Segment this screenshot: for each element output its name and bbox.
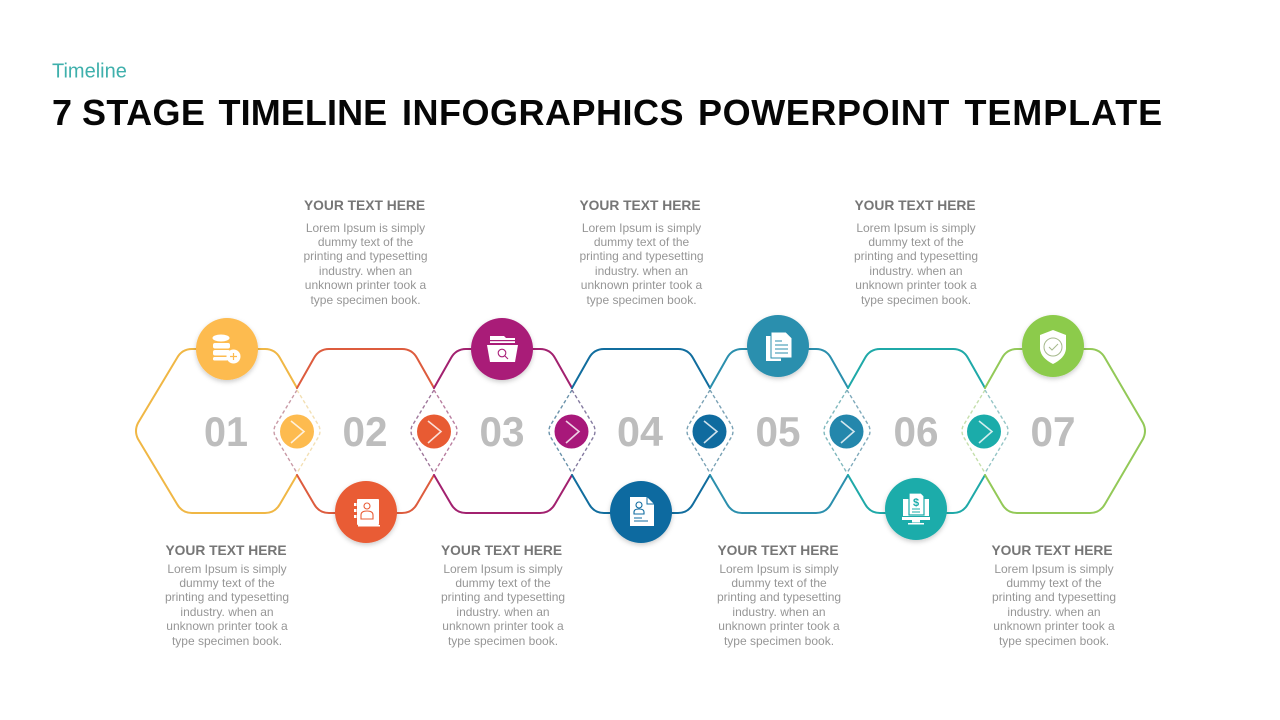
text block: stage 4: type specimen book.	[586, 293, 697, 307]
text block: stage 3: type specimen book.	[448, 634, 558, 648]
text block: stage 4: printing and typesetting	[579, 249, 704, 263]
text block: stage 1: Lorem Ipsum is simply	[167, 562, 287, 576]
text block: stage 2: dummy text of the	[318, 235, 414, 249]
text block: stage 6: printing and typesetting	[854, 249, 978, 263]
text block: stage 6: unknown printer took a	[855, 278, 977, 292]
text block: stage 7: printing and typesetting	[992, 590, 1116, 604]
text block: stage 2: YOUR TEXT HERE	[304, 198, 425, 213]
text block: stage 1: type specimen book.	[172, 634, 282, 648]
number 05: 05	[756, 408, 800, 455]
text block: stage 7	[991, 543, 1116, 648]
text block: stage 7: Lorem Ipsum is simply	[994, 562, 1114, 576]
text block: stage 4: industry. when an	[595, 264, 688, 278]
text block: stage 1: printing and typesetting	[165, 590, 289, 604]
text block: stage 2: industry. when an	[319, 264, 412, 278]
number 04: 04	[617, 408, 664, 455]
text block: stage 6	[854, 198, 978, 307]
title: POWERPOINT	[698, 92, 961, 133]
text block: stage 3	[441, 543, 565, 648]
text block: stage 4: dummy text of the	[594, 235, 690, 249]
connector 6: dashed diamond and arrow	[962, 390, 1008, 473]
text block: stage 2: printing and typesetting	[303, 249, 428, 263]
text block: stage 5	[717, 543, 841, 648]
hexagon 2 outline	[297, 349, 434, 513]
text block: stage 7: industry. when an	[1007, 605, 1101, 619]
text block: stage 7: unknown printer took a	[993, 619, 1115, 633]
connector 5: dashed diamond and arrow	[824, 390, 870, 473]
number 06: 06	[894, 408, 938, 455]
hexagon chain	[136, 349, 1145, 513]
hexagon 1 outline	[136, 349, 297, 513]
number 02: 02	[342, 408, 388, 455]
text block: stage 6: dummy text of the	[868, 235, 964, 249]
text block: stage 7: type specimen book.	[999, 634, 1109, 648]
connector 1: dashed diamond and arrow	[274, 390, 320, 473]
text block: stage 3: unknown printer took a	[442, 619, 564, 633]
text block: stage 5: dummy text of the	[731, 576, 827, 590]
stage numbers	[204, 408, 1076, 455]
text block: stage 4: unknown printer took a	[581, 278, 703, 292]
connector 4: dashed diamond and arrow	[687, 390, 733, 473]
hexagon 7 outline	[985, 349, 1145, 513]
text block: stage 7: dummy text of the	[1006, 576, 1102, 590]
title: INFOGRAPHICS	[402, 92, 695, 133]
icon: address book	[335, 481, 397, 543]
text block: stage 6: industry. when an	[869, 264, 963, 278]
title: 7	[52, 92, 82, 133]
hexagon 4 outline	[572, 349, 710, 513]
icon: monitor with invoice: $	[913, 497, 919, 509]
text block: stage 3: Lorem Ipsum is simply	[443, 562, 563, 576]
text block: stage 2	[303, 198, 428, 307]
text block: stage 3: dummy text of the	[455, 576, 551, 590]
text block: stage 4: Lorem Ipsum is simply	[582, 221, 701, 235]
text block: stage 5: unknown printer took a	[718, 619, 840, 633]
text block: stage 1: unknown printer took a	[166, 619, 288, 633]
hexagon 6 outline	[848, 349, 985, 513]
text block: stage 3: industry. when an	[456, 605, 550, 619]
icon: user document	[610, 481, 672, 543]
text block: stage 6: Lorem Ipsum is simply	[856, 221, 976, 235]
hexagon 3 outline	[434, 349, 572, 513]
number 03: 03	[480, 408, 524, 455]
hexagon 5 outline	[710, 349, 848, 513]
text block: stage 4	[579, 198, 704, 307]
text block: stage 2: type specimen book.	[310, 293, 421, 307]
text block: stage 3: YOUR TEXT HERE	[441, 543, 562, 558]
connector 2: dashed diamond and arrow	[411, 390, 457, 473]
connector 3: dashed diamond and arrow	[549, 390, 595, 473]
text block: stage 1	[165, 543, 289, 648]
text block: stage 5: YOUR TEXT HERE	[717, 543, 839, 558]
icon: shield check	[1022, 315, 1084, 377]
text block: stage 1: dummy text of the	[179, 576, 275, 590]
text block: stage 6: type specimen book.	[861, 293, 971, 307]
text block: stage 2: Lorem Ipsum is simply	[306, 221, 425, 235]
text block: stage 5: Lorem Ipsum is simply	[719, 562, 839, 576]
icon: database upload	[196, 318, 258, 380]
text block: stage 5: industry. when an	[732, 605, 826, 619]
text block: stage 4: YOUR TEXT HERE	[579, 198, 701, 213]
number 01: 01	[204, 408, 248, 455]
icon: monitor with invoice	[885, 478, 947, 540]
text block: stage 6: YOUR TEXT HERE	[854, 198, 976, 213]
text block: stage 1: industry. when an	[180, 605, 274, 619]
icon: documents	[747, 315, 809, 377]
text block: stage 7: YOUR TEXT HERE	[991, 543, 1113, 558]
text block: stage 5: type specimen book.	[724, 634, 834, 648]
number 07: 07	[1030, 408, 1076, 455]
text block: stage 3: printing and typesetting	[441, 590, 565, 604]
title: STAGE	[82, 92, 216, 133]
icon: folder search	[471, 318, 533, 380]
text block: stage 5: printing and typesetting	[717, 590, 841, 604]
text block: stage 1: YOUR TEXT HERE	[165, 543, 287, 558]
subtitle: Timeline	[52, 60, 127, 82]
title: TIMELINE	[218, 92, 397, 133]
text block: stage 2: unknown printer took a	[305, 278, 427, 292]
title: TEMPLATE	[964, 92, 1163, 133]
